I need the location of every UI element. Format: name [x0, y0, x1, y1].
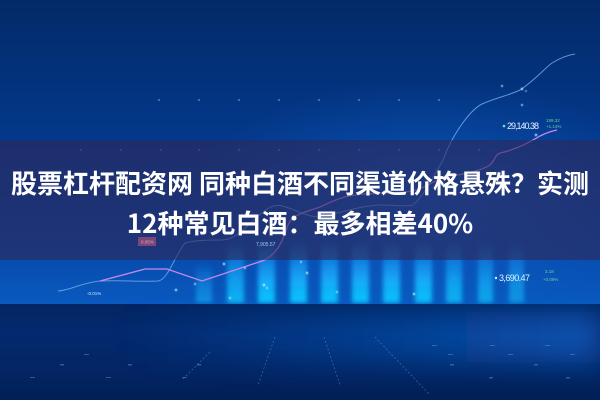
- readout: 29,140.38: [503, 118, 561, 131]
- chart dots: [175, 85, 537, 299]
- background grid marks: [80, 99, 480, 151]
- readout: 3,690.47: 3,690.47: [499, 273, 530, 283]
- readout: 3,690.47: +0.09%: [543, 277, 558, 282]
- perspective floor lines: [182, 337, 430, 395]
- blue index line: [58, 54, 575, 291]
- glowing light columns: [196, 240, 524, 303]
- floor grid marks: [30, 345, 575, 378]
- dashed horizon line: [90, 312, 530, 314]
- readout: 29,140.38: 29,140.38: [507, 121, 539, 131]
- readout: 7,905.57: 7,905.57: [256, 242, 276, 248]
- purple index line: [100, 130, 557, 281]
- title line 1: 股票杠杆配资网 同种白酒不同渠道价格悬殊？实测: [11, 164, 589, 201]
- translucent title band: [0, 140, 600, 260]
- readout: 29,140.38: 199.32: [546, 118, 560, 123]
- tag: 0.05%: [138, 237, 156, 246]
- readout: 3,690.47: [495, 269, 558, 283]
- readout: 29,140.38: +1.14%: [546, 124, 561, 129]
- readout: 3,690.47: 3.18: [545, 269, 554, 274]
- title line 2: 12种常见白酒：最多相差40%: [127, 204, 473, 241]
- floor: [0, 304, 600, 400]
- tag: 0.05%: 0.05%: [141, 240, 154, 244]
- readout: -0.01%: -0.01%: [87, 291, 101, 296]
